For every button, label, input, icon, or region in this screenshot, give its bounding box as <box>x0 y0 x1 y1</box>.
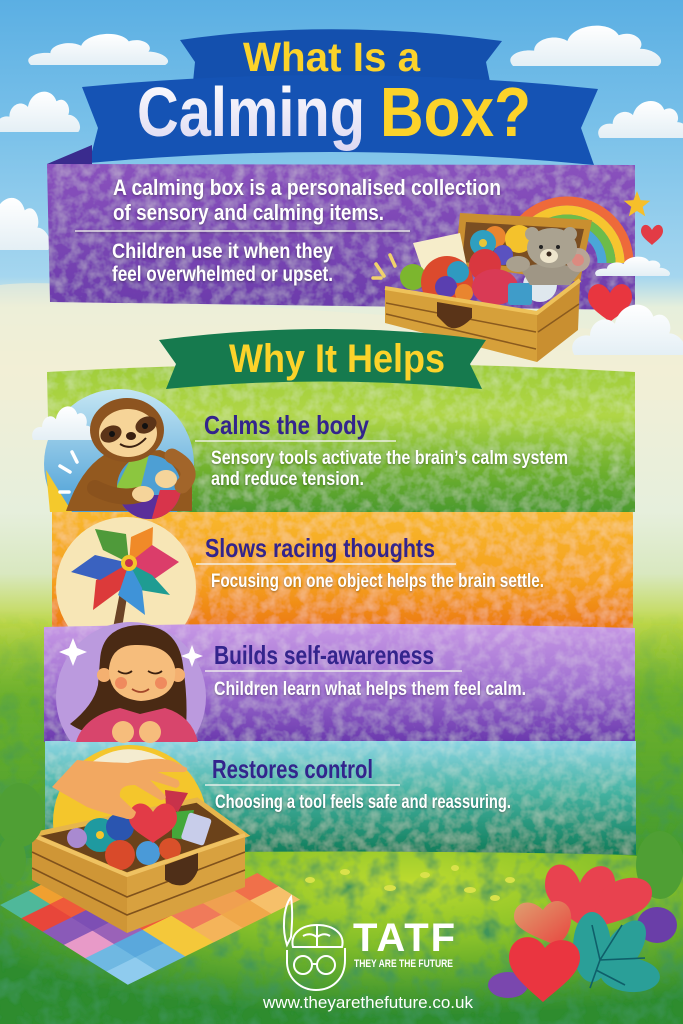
back hearts <box>545 864 652 928</box>
icon: hearts and leaves bouquet <box>488 864 677 1002</box>
heading: Slows racing thoughts <box>205 533 435 563</box>
teddy bear <box>506 227 590 285</box>
heart being picked <box>129 803 177 843</box>
latch <box>165 853 198 885</box>
hair <box>70 625 187 733</box>
logo tagline: THEY ARE THE FUTURE <box>354 958 453 970</box>
text: calms the body: Calms the body <box>204 410 369 440</box>
description: calms the body <box>211 447 568 490</box>
description: Children learn what helps them feel calm. <box>214 678 526 700</box>
description: calms the body: Sensory tools activate the brain’s calm system <box>211 447 568 469</box>
definition text: feel overwhelmed or upset. <box>112 263 333 286</box>
description: Choosing a tool feels safe and reassuring. <box>215 791 511 813</box>
definition text: A calming box is a personalised collection <box>113 175 501 200</box>
hub <box>121 555 137 571</box>
cloud near rainbow <box>595 257 670 276</box>
sloth arms and paws <box>172 456 188 486</box>
panel: why it helps, green <box>47 364 635 512</box>
sparkles <box>59 638 203 667</box>
title line one: What Is a <box>243 34 421 80</box>
toys <box>400 225 590 308</box>
description: calms the body: and reduce tension. <box>211 468 364 490</box>
chest lid <box>455 213 592 282</box>
sloth body <box>66 450 192 511</box>
teal leaf <box>573 912 661 995</box>
clouds <box>0 26 683 250</box>
cloud behind sloth <box>32 406 95 440</box>
title word box: Box? <box>380 73 531 151</box>
heading ribbon: why it helps <box>159 329 486 389</box>
notepad <box>413 233 467 272</box>
heading text: Why It Helps <box>229 337 445 381</box>
panel: slows racing thoughts, orange <box>52 512 633 628</box>
lawn flowers <box>305 865 515 901</box>
title word calming: Calming <box>137 73 365 151</box>
icon: pinwheel <box>56 517 196 626</box>
icon: large heart <box>588 284 632 322</box>
toys <box>67 790 212 870</box>
icon: bushes <box>0 783 683 899</box>
cloud lower right <box>572 305 683 355</box>
ears <box>97 668 111 682</box>
heading: Builds self-awareness <box>214 640 434 670</box>
heading: Restores control <box>212 754 373 784</box>
panel: restores control, teal <box>45 741 636 855</box>
panel: builds self-awareness, purple <box>44 624 635 742</box>
ribbon fold <box>47 145 92 165</box>
icon: small heart <box>641 225 663 245</box>
leaf veins <box>590 925 645 988</box>
sloth head <box>90 398 164 462</box>
top ribbon <box>180 29 502 82</box>
chest body <box>537 280 580 362</box>
orange heart <box>514 901 571 945</box>
definition text <box>75 175 501 286</box>
icon: hand choosing from wooden box <box>32 745 245 933</box>
logo: TATF <box>284 897 455 990</box>
icon: rainbow <box>505 201 629 263</box>
hands <box>112 721 134 743</box>
icon: star <box>624 191 650 216</box>
ball <box>117 455 180 519</box>
website url: www.theyarethefuture.co.uk <box>262 993 473 1012</box>
blades <box>95 529 129 563</box>
box front <box>32 835 127 933</box>
logo mark: head with brain and glasses <box>284 897 345 990</box>
front red heart <box>509 937 580 1002</box>
box interior <box>32 800 245 875</box>
logo name: TATF <box>353 916 455 960</box>
latch <box>437 302 472 328</box>
jumper <box>76 708 198 742</box>
icon: girl with eyes closed <box>56 622 206 743</box>
panel: definition <box>47 145 635 310</box>
icon: sloth hugging ball <box>32 389 196 519</box>
main ribbon <box>82 75 598 165</box>
icon: picnic blanket <box>0 820 300 985</box>
title banner <box>82 29 598 165</box>
face <box>109 645 175 701</box>
sparkle marks <box>373 255 395 278</box>
definition text: of sensory and calming items. <box>113 200 384 225</box>
yellow sun backdrop <box>53 745 204 828</box>
sparkle marks <box>60 452 77 492</box>
definition text: Children use it when they <box>112 240 333 263</box>
hand <box>52 759 187 819</box>
stick <box>113 566 132 628</box>
icon: toy chest <box>373 213 592 362</box>
description: Focusing on one object helps the brain settle. <box>211 570 544 592</box>
